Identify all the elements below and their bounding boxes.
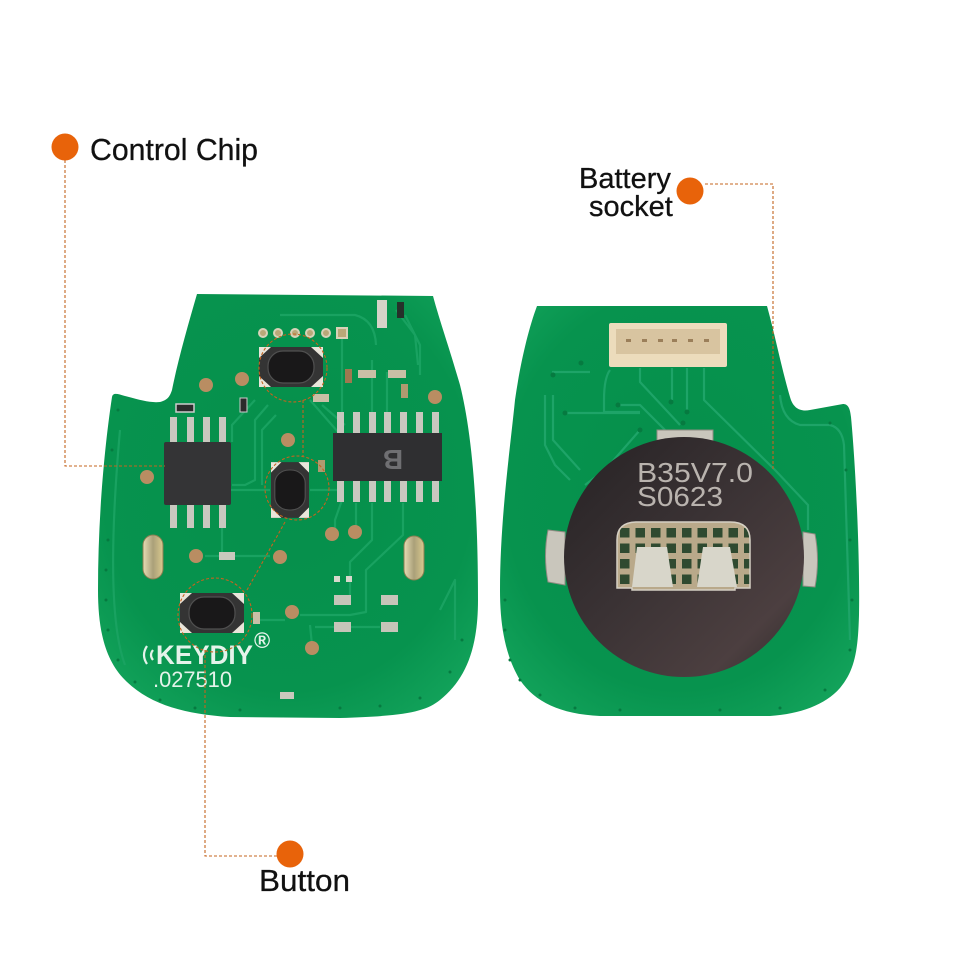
board outline bbox=[500, 306, 859, 716]
label: socket bbox=[589, 191, 673, 223]
logic chip: B bbox=[383, 444, 403, 475]
battery socket clip tabs bbox=[546, 430, 818, 587]
KEYDIY logo: .027510 bbox=[153, 667, 232, 692]
oval solder contacts bbox=[143, 535, 424, 580]
connector socket bbox=[609, 323, 727, 367]
control chip bbox=[164, 417, 231, 528]
header pin holes bbox=[259, 328, 347, 338]
via dots bbox=[504, 360, 854, 712]
label: Control Chip bbox=[90, 132, 258, 167]
battery socket disc bbox=[564, 437, 804, 677]
stamped marking bbox=[637, 457, 753, 512]
copper test pads bbox=[140, 372, 442, 655]
board outline bbox=[98, 294, 478, 718]
marker dot bbox=[276, 840, 304, 868]
KEYDIY logo: ® bbox=[254, 628, 270, 653]
stamped marking: S0623 bbox=[637, 481, 723, 512]
spring tabs bbox=[632, 547, 737, 587]
bottom button bbox=[180, 593, 244, 633]
leader line and button rings bbox=[178, 334, 329, 856]
label: Battery bbox=[579, 163, 671, 195]
leader line bbox=[65, 160, 165, 466]
left circuit board front bbox=[98, 294, 478, 718]
copper traces bbox=[113, 310, 455, 665]
KEYDIY logo: KEYDIY bbox=[156, 640, 253, 670]
copper traces bbox=[545, 368, 850, 640]
marker dot bbox=[676, 178, 704, 204]
small SMD components bbox=[176, 300, 408, 699]
callout: battery socket bbox=[579, 163, 773, 470]
leader line bbox=[705, 184, 773, 470]
top button bbox=[259, 347, 323, 387]
middle button bbox=[271, 462, 309, 518]
edge via dots bbox=[104, 408, 464, 712]
window with mesh bbox=[617, 522, 750, 590]
marker dot bbox=[52, 134, 78, 160]
label: Button bbox=[259, 863, 350, 898]
callout: button bbox=[178, 334, 350, 898]
KEYDIY logo bbox=[144, 628, 270, 692]
callout: control chip bbox=[52, 132, 258, 466]
right circuit board back bbox=[500, 306, 859, 716]
logic chip bbox=[333, 412, 442, 502]
stamped marking: B35V7.0 bbox=[637, 457, 753, 488]
